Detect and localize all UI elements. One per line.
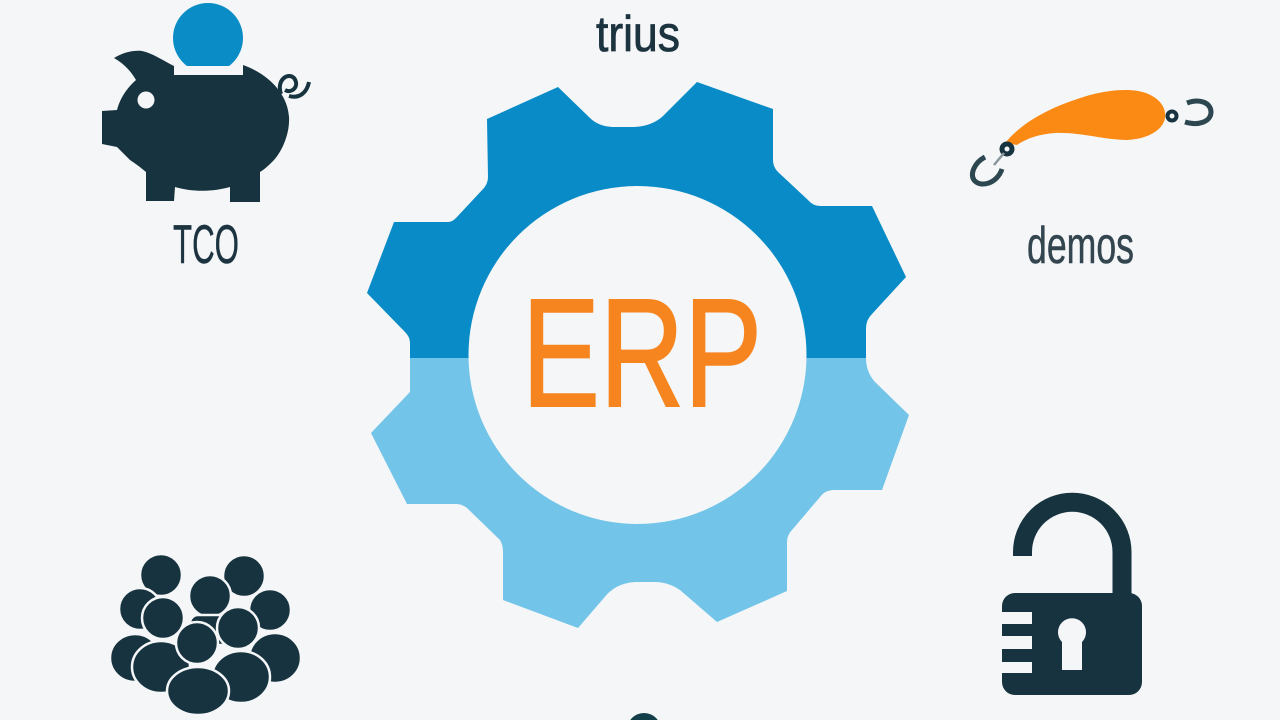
- right hook: [1185, 101, 1211, 124]
- pig eye: [138, 92, 154, 108]
- gear centre circle: [468, 186, 806, 524]
- icon: partial figure at bottom edge: [627, 713, 661, 720]
- shackle: [1022, 502, 1122, 598]
- label: demos: demos: [1027, 217, 1134, 275]
- icon: open padlock: [1000, 502, 1142, 695]
- keyhole: [1058, 618, 1086, 670]
- coin: [173, 3, 243, 73]
- left hook: [972, 157, 1002, 184]
- pig tail: [280, 76, 309, 97]
- lure body: [1005, 90, 1165, 145]
- icon: piggy bank: [102, 3, 309, 202]
- ERP label: ERP: [522, 267, 762, 439]
- left connector: [994, 153, 1004, 165]
- label: trius: trius: [596, 6, 680, 62]
- gear upper half: [367, 82, 906, 358]
- lock body: [1002, 593, 1142, 695]
- central gear: [367, 82, 909, 628]
- label: TCO: TCO: [173, 213, 239, 275]
- gear lower half: [371, 358, 909, 628]
- pig body: [102, 51, 289, 202]
- lock notches: [1000, 612, 1032, 673]
- right ring: [1168, 112, 1176, 120]
- left ring: [1002, 144, 1012, 154]
- icon: fishing lure: [972, 90, 1211, 184]
- icon: group of people: [110, 554, 301, 715]
